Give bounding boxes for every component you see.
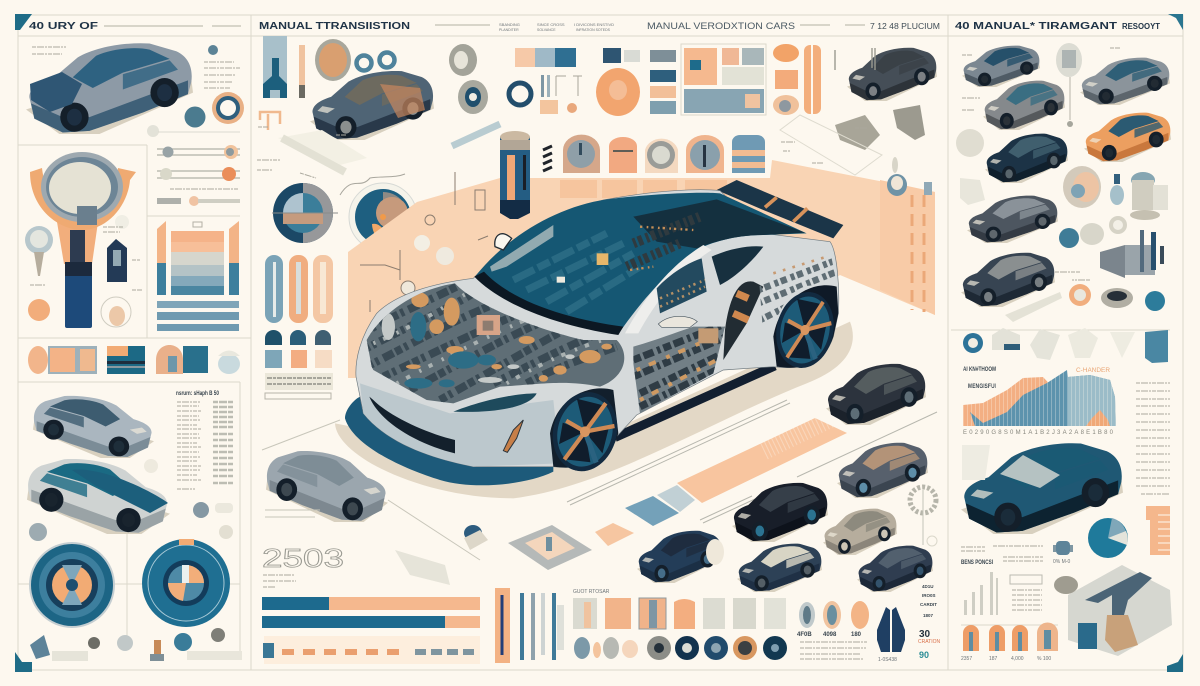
header small captions: INFRATION SOTEDS bbox=[576, 28, 611, 32]
side skirt bbox=[613, 362, 777, 442]
a-pillar bbox=[625, 245, 712, 333]
handwritten note bbox=[340, 174, 405, 195]
heading: manual transmission: MANUAL TTRANSIISTION bbox=[259, 20, 410, 32]
windshield base bbox=[474, 272, 623, 335]
bottom left icon row bbox=[30, 628, 242, 661]
big stats: 30 bbox=[919, 629, 931, 640]
dash marks bbox=[543, 146, 552, 171]
bottom sample swatches bbox=[573, 589, 786, 629]
side list: IRO0S bbox=[922, 593, 936, 598]
shifter dial rim bbox=[30, 168, 136, 230]
domes and thumbs bbox=[265, 330, 332, 368]
arch labels: 4,000 bbox=[1011, 656, 1024, 662]
top centre dashboard bbox=[509, 44, 821, 116]
small heading: BENS PONCSI bbox=[961, 560, 993, 566]
engine parts bbox=[835, 105, 925, 150]
gradient bar bbox=[515, 48, 576, 67]
arch labels: % 100 bbox=[1037, 656, 1051, 662]
oval labels bbox=[797, 632, 862, 638]
ovals bbox=[799, 601, 869, 629]
engine details bbox=[363, 287, 617, 400]
pale panel bbox=[557, 605, 564, 650]
buggy roll cap bbox=[706, 539, 724, 565]
bottom pens bbox=[495, 588, 564, 663]
motor label: 0% M-0 bbox=[1053, 559, 1070, 565]
car: outline bbox=[737, 544, 822, 592]
front splitter bbox=[345, 397, 553, 485]
swatch caption: GUOT RTOSAR bbox=[573, 589, 610, 595]
corner marker: top left bbox=[15, 14, 32, 30]
canister unit bbox=[1130, 172, 1168, 220]
bar two bbox=[262, 616, 480, 628]
note block bbox=[1010, 575, 1042, 610]
lower left centre bbox=[262, 420, 488, 587]
peach tiles bbox=[560, 180, 727, 198]
notes bbox=[962, 48, 1120, 280]
arch labels: 2357 bbox=[961, 656, 972, 662]
slider knobs bbox=[160, 145, 238, 181]
white parts on peach bbox=[414, 174, 907, 265]
tall bracket bbox=[263, 36, 287, 98]
table value column bbox=[213, 402, 233, 483]
car: buggy bbox=[637, 531, 722, 583]
side window bbox=[657, 258, 707, 313]
canister bbox=[500, 131, 530, 219]
thumb 2 bbox=[107, 346, 145, 374]
light right area bbox=[1068, 375, 1116, 426]
bar one bbox=[262, 597, 480, 610]
oval labels: 4F0B bbox=[797, 632, 812, 638]
rings bbox=[356, 52, 394, 70]
wireframe car bbox=[266, 451, 388, 522]
header rules bbox=[104, 25, 865, 26]
small wands bbox=[835, 48, 932, 195]
bottom discs bbox=[574, 636, 787, 660]
column: mechanical parts top bbox=[257, 36, 500, 178]
orange badges bbox=[773, 44, 821, 115]
front bumper shade bbox=[360, 383, 560, 467]
blue-orange car bbox=[310, 71, 434, 140]
stat teal: 90 bbox=[919, 650, 929, 660]
orange hook bbox=[260, 112, 280, 130]
front wheel bbox=[545, 385, 625, 478]
chart subtitle: MENGISFUI bbox=[968, 384, 996, 390]
chart titles: AI KN#THOOM bbox=[963, 367, 996, 373]
orange bump bbox=[1086, 410, 1110, 426]
blueprint sheet bbox=[780, 115, 882, 175]
panel: sliders bbox=[157, 145, 240, 206]
heading: manual cars: MANUAL VERODXTION CARS bbox=[647, 21, 795, 32]
side pillars base bbox=[157, 263, 239, 295]
pale tube bbox=[282, 138, 345, 172]
main car bbox=[335, 180, 853, 498]
pale tube 2 bbox=[452, 124, 500, 146]
chart axis: E0290G8S0M1A1B2J3A2A8E1B80 bbox=[963, 430, 1114, 436]
car orange core bbox=[380, 84, 425, 118]
small icons bbox=[29, 459, 233, 541]
small motor bbox=[1053, 541, 1073, 555]
disk inner bbox=[319, 43, 347, 77]
bar three labels bbox=[263, 636, 480, 664]
oval labels: 4098 bbox=[823, 632, 837, 638]
motor notes bbox=[961, 546, 1043, 561]
bearings bbox=[449, 44, 488, 114]
big teal car bbox=[961, 443, 1123, 534]
orange area bbox=[963, 377, 1060, 426]
dial: orange pointer bbox=[349, 183, 417, 251]
left mirror bbox=[495, 234, 512, 250]
sketch lines bbox=[1005, 292, 1062, 322]
car body bbox=[356, 190, 839, 467]
small gauge text bbox=[257, 127, 346, 178]
orange sleeve bbox=[495, 588, 510, 663]
blue area bbox=[970, 370, 1116, 426]
machine bbox=[1054, 565, 1172, 656]
windshield on teal car bbox=[1000, 455, 1060, 488]
circular gauge: right bbox=[142, 539, 230, 627]
row of boxes bbox=[963, 328, 1168, 363]
horizontal progress bars bbox=[262, 597, 480, 664]
pale box bbox=[960, 178, 985, 205]
top right objects in centre bbox=[780, 48, 937, 195]
icon: sphere bbox=[184, 106, 206, 128]
table title: nsrurn: sHaph B 50 bbox=[176, 391, 220, 397]
gauge column bbox=[299, 45, 305, 98]
engine bay bbox=[367, 283, 624, 403]
slider base bbox=[147, 125, 240, 137]
towers bbox=[1100, 230, 1164, 278]
slider captions bbox=[170, 188, 238, 190]
headlight bbox=[453, 393, 537, 412]
door cutaway bbox=[633, 327, 725, 413]
peach background panel bbox=[348, 160, 935, 380]
orange table bbox=[1146, 506, 1170, 555]
ticked gauge bbox=[157, 196, 240, 206]
small canister bbox=[464, 525, 488, 550]
header small captions bbox=[499, 22, 614, 32]
shifter cone bbox=[57, 222, 98, 264]
thumb 4 bbox=[218, 350, 240, 374]
panel: summary card bbox=[681, 44, 766, 115]
panel: stacked bars bbox=[157, 221, 239, 331]
header small captions: SINCE CROSS bbox=[537, 22, 565, 27]
car: beige bbox=[823, 509, 897, 555]
rear cutaway details bbox=[733, 293, 748, 320]
header small captions: SOLVANCE bbox=[537, 28, 556, 32]
heading: right: 40 MANUAL* TIRAMGANT bbox=[955, 20, 1118, 32]
side window items bbox=[660, 280, 705, 307]
car: black bbox=[732, 483, 828, 542]
side list: 1807 bbox=[923, 613, 934, 618]
shift knob bbox=[1056, 43, 1082, 127]
side list bbox=[920, 584, 937, 618]
dark car bbox=[847, 48, 937, 101]
rear cutaway bbox=[723, 281, 763, 360]
icon: small pill bbox=[208, 45, 218, 55]
door details bbox=[633, 323, 727, 407]
area chart bbox=[963, 367, 1116, 436]
bumper vent bbox=[503, 420, 523, 452]
corner marker: bottom left bbox=[15, 652, 32, 672]
silver coupe bbox=[33, 396, 154, 458]
disc bbox=[1063, 166, 1101, 208]
car: navy bbox=[857, 546, 933, 592]
paper sheet bbox=[278, 130, 367, 165]
machine frame bbox=[508, 525, 592, 570]
slider lines bbox=[157, 149, 240, 178]
windshield glare bbox=[490, 225, 553, 272]
teal roof coupe bbox=[27, 459, 170, 534]
shifter shaft bbox=[65, 230, 92, 328]
disk bbox=[315, 39, 351, 81]
panel: left top bbox=[26, 43, 244, 137]
pale sketch bbox=[962, 445, 990, 480]
shield bbox=[877, 607, 905, 652]
corner marker: bottom right bbox=[1167, 654, 1183, 672]
table rows bbox=[177, 402, 201, 489]
side list: 4D1U bbox=[922, 584, 934, 589]
dial: blue half bbox=[272, 183, 338, 243]
side list: CARDIT bbox=[920, 602, 937, 607]
side pillars bbox=[157, 221, 239, 263]
front wheel arch bbox=[550, 388, 618, 467]
side mirror bbox=[658, 316, 697, 327]
car grid: centre bottom bbox=[508, 364, 937, 592]
thumb 3 bbox=[156, 345, 208, 374]
rear window bbox=[712, 246, 763, 285]
panel: right cars bbox=[956, 43, 1171, 363]
bar icon bbox=[193, 222, 202, 227]
circular gauge: left bbox=[29, 542, 115, 628]
diagonal lines bbox=[262, 420, 480, 560]
heading: right subtitle: RESOOYT bbox=[1122, 22, 1160, 31]
gauges row bbox=[563, 135, 765, 173]
panel: left cars and table bbox=[27, 391, 233, 541]
arch labels: 187 bbox=[989, 656, 998, 662]
arches bbox=[963, 622, 1058, 651]
pie chart bbox=[1088, 518, 1128, 558]
rear quarter details bbox=[758, 257, 837, 320]
header small captions: SBANDING bbox=[499, 22, 520, 27]
gray sedan bbox=[26, 43, 193, 134]
small parts bbox=[25, 215, 142, 327]
tiny parts on peach bbox=[360, 172, 488, 312]
text block bbox=[265, 373, 333, 399]
panel: gear shifter bbox=[25, 152, 142, 328]
car: dark bbox=[826, 364, 926, 425]
big number: 2503 bbox=[262, 543, 344, 573]
icon: ring gauge bbox=[212, 92, 244, 124]
notes bbox=[800, 642, 867, 659]
bulb bbox=[1110, 174, 1124, 205]
corner marker: top right bbox=[1168, 14, 1183, 30]
header bar bbox=[29, 20, 1160, 32]
diagonal colour band bbox=[567, 400, 937, 546]
arch labels bbox=[961, 656, 1051, 662]
pale gear bbox=[956, 129, 984, 157]
thumb 1 bbox=[28, 346, 97, 374]
canopy interior bbox=[513, 217, 700, 312]
stacked chips bbox=[603, 48, 676, 114]
gear bbox=[910, 487, 937, 546]
oval labels: 180 bbox=[851, 632, 862, 638]
header number text: 7 12 48 PLUCIUM bbox=[870, 22, 940, 31]
callout text bbox=[32, 47, 240, 88]
header small captions: I DIVICONS ENSTIVD bbox=[574, 22, 614, 27]
strip of small thumbnails bbox=[28, 345, 240, 374]
ground shadow bbox=[335, 322, 853, 498]
teal hood bbox=[72, 470, 168, 513]
peach stripes bbox=[912, 195, 924, 312]
rear wheel bbox=[769, 287, 841, 373]
text lines bbox=[1136, 383, 1170, 494]
chart orange caption: C-HANDER bbox=[1076, 368, 1111, 374]
right side text panel bbox=[961, 383, 1172, 662]
grille bbox=[369, 397, 455, 453]
ring parts bbox=[1059, 216, 1127, 248]
stat caption: CRATION bbox=[918, 639, 941, 645]
rear wheel arch bbox=[773, 285, 838, 368]
chart stripes bbox=[963, 370, 1116, 426]
pills bbox=[265, 255, 333, 323]
glass canopy bbox=[475, 193, 807, 332]
pale sketch bbox=[395, 550, 450, 585]
spoiler bbox=[717, 180, 843, 238]
glyph bars bbox=[540, 75, 582, 114]
small bars bbox=[964, 572, 998, 615]
pen set bbox=[522, 593, 554, 660]
header small captions: PLANDITER bbox=[499, 28, 519, 32]
legend bars bbox=[157, 301, 239, 331]
heading: left: 40 URY OF bbox=[29, 20, 99, 32]
car: gray orange bbox=[837, 443, 928, 498]
shifter dial bbox=[41, 152, 123, 225]
annotations bbox=[781, 128, 868, 163]
arch inserts bbox=[969, 630, 1051, 651]
dark ring bbox=[509, 83, 531, 105]
orange dial bbox=[596, 68, 640, 116]
bottom discs bbox=[1069, 284, 1165, 311]
stacked layers bbox=[171, 231, 224, 295]
number caption bbox=[263, 575, 296, 587]
dark hood of sedan bbox=[30, 72, 82, 112]
shield label: 1-0S438 bbox=[878, 657, 897, 663]
navy pen bbox=[500, 595, 504, 655]
lower right of centre column bbox=[797, 584, 941, 663]
canopy rear dark bbox=[633, 199, 805, 248]
